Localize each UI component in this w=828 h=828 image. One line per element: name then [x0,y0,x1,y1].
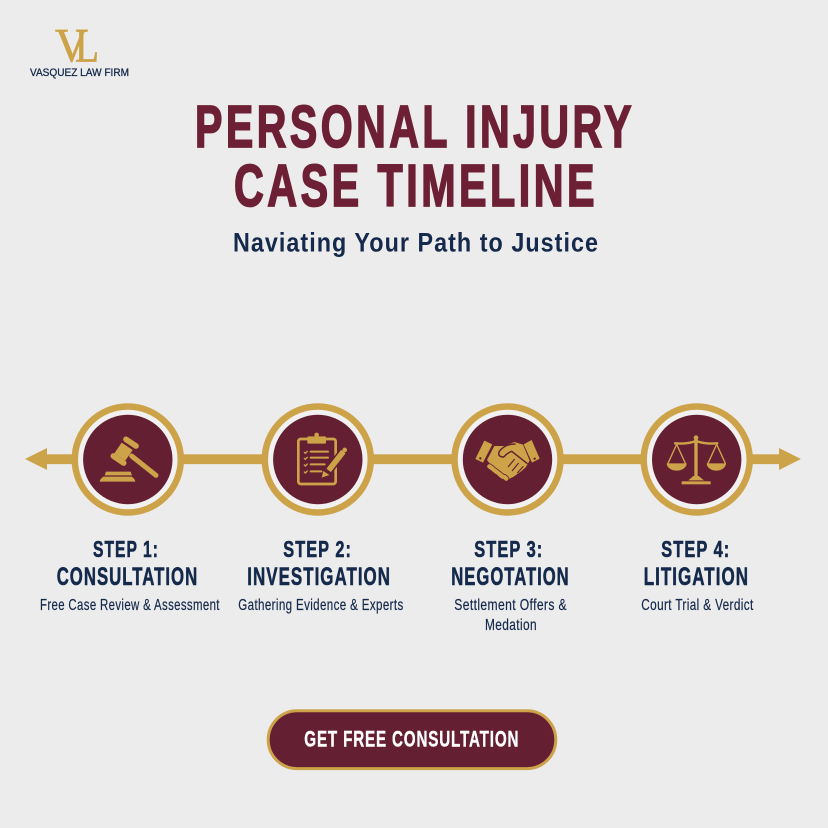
call-to-action button [268,711,556,769]
step 3 text: STEP 3: [474,536,543,562]
step 2 text: STEP 2: [283,536,352,562]
icon: clipboard and pen [298,433,347,484]
call-to-action button: GET FREE CONSULTATION [304,727,519,752]
logo monogram: L [75,20,99,72]
step 1 text [40,536,220,614]
step 4 text: STEP 4: [661,536,730,562]
logo wordmark: VASQUEZ LAW FIRM [30,67,129,79]
icon: handshake [475,440,540,479]
step 3 text: NEGOTATION [451,563,570,591]
title: PERSONAL INJURY [195,94,635,160]
step 1 text: Free Case Review & Assessment [40,597,220,614]
step 1 text: CONSULTATION [57,563,198,591]
step 2 text [238,536,404,614]
step 2 text: Gathering Evidence & Experts [238,597,404,614]
step 1 circle with gavel icon [75,406,181,512]
logo monogram: V [55,20,88,72]
step 3 text: Settlement Offers & [454,597,567,614]
step 3 circle with handshake icon [454,406,560,512]
step 4 text: LITIGATION [644,563,749,591]
icon: scales of justice [667,435,726,484]
title: CASE TIMELINE [234,153,598,219]
title [195,94,635,219]
step 3 text [451,536,570,634]
icon: gavel [100,439,156,482]
step 4 text: Court Trial & Verdict [641,597,754,614]
step 1 text: STEP 1: [93,536,159,562]
step 4 text [641,536,754,614]
timeline arrow [25,448,801,470]
step 2 text: INVESTIGATION [247,563,391,591]
step 3 text: Medation [485,617,537,634]
logo: Vasquez Law Firm [30,20,129,79]
step 4 circle with scales icon [644,406,750,512]
step 2 circle with clipboard icon [265,406,371,512]
subtitle: Naviating Your Path to Justice [233,228,599,258]
